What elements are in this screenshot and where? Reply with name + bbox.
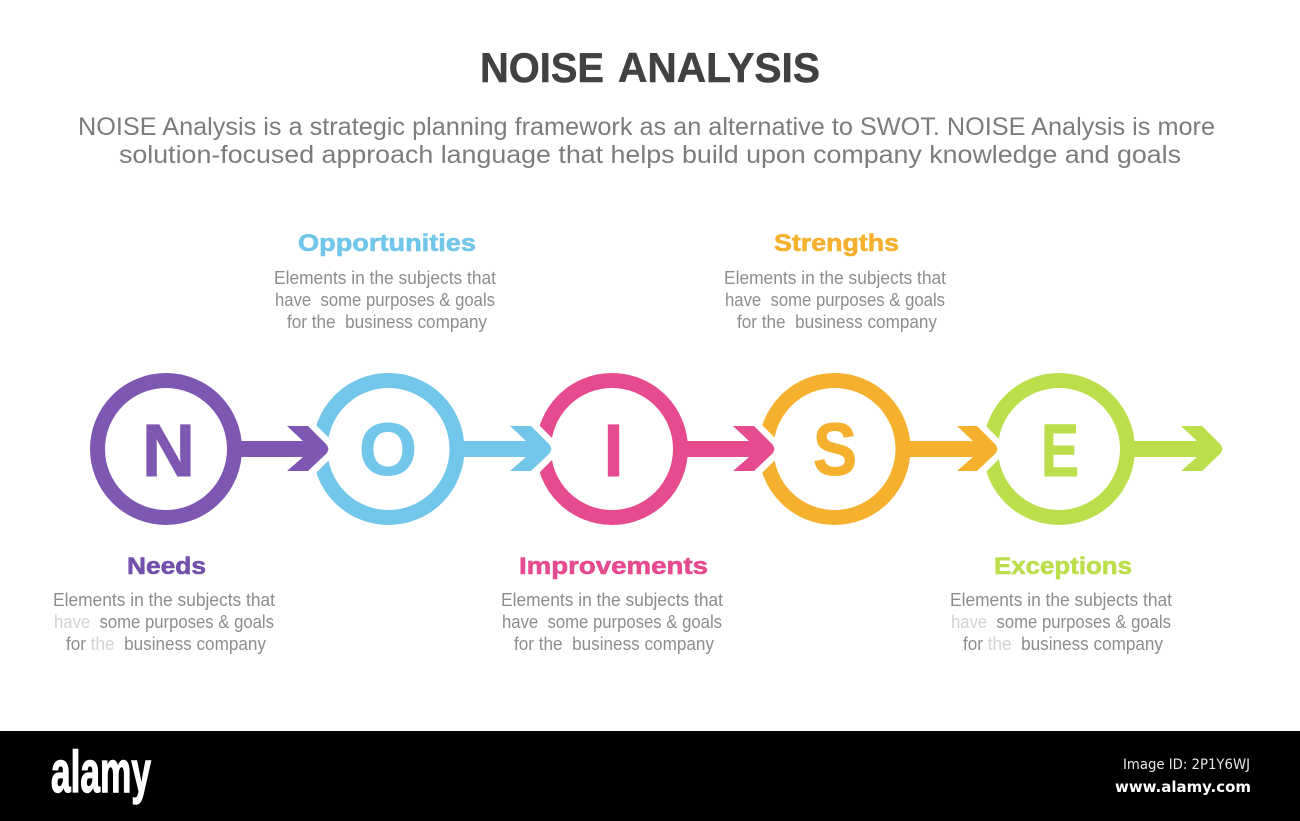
- step O: circle and letter: [320, 380, 457, 518]
- subtitle: NOISE Analysis is a strategic planning framework as an alternative to SWOT. NOISE Analysis is more: [78, 113, 1215, 141]
- text block: Needs: Elements in the subjects that: [53, 590, 275, 610]
- step E: circle and letter: E: [1041, 409, 1079, 492]
- arrow: N to O: [240, 409, 340, 489]
- text block: Needs: [53, 553, 275, 654]
- text block: Opportunities: Opportunities: [298, 230, 476, 257]
- title: ANALYSIS: [618, 44, 820, 91]
- text block: Exceptions: [950, 553, 1172, 654]
- text block: Strengths: have some purposes & goals: [725, 290, 945, 310]
- step I: circle and letter: I: [604, 409, 624, 492]
- subtitle: solution-focused approach language that helps build upon company knowledge and goals: [119, 141, 1181, 169]
- text block: Opportunities: have some purposes & goals: [275, 290, 495, 310]
- website: www.alamy.com: [1115, 778, 1251, 796]
- step O: circle and letter: O: [359, 408, 417, 491]
- image id: Image ID: 2P1Y6WJ: [1123, 757, 1250, 773]
- step E: circle and letter: [990, 380, 1128, 518]
- step S: circle and letter: S: [813, 408, 857, 491]
- text block: Opportunities: for the business company: [287, 312, 487, 332]
- title: NOISE: [480, 44, 604, 91]
- text block: Improvements: [501, 553, 723, 654]
- text block: Improvements: Elements in the subjects that: [501, 590, 723, 610]
- text block: Strengths: Strengths: [774, 230, 899, 257]
- text block: Strengths: for the business company: [737, 312, 937, 332]
- logo: alamy: alamy: [51, 740, 151, 805]
- text block: Exceptions: Elements in the subjects that: [950, 590, 1172, 610]
- step S: circle and letter: [766, 380, 903, 518]
- text block: Improvements: have some purposes & goals: [502, 612, 722, 632]
- text block: Needs: for the business company: [66, 634, 266, 654]
- text block: Needs: have some purposes & goals: [54, 612, 274, 632]
- text block: Exceptions: Exceptions: [994, 553, 1132, 580]
- text block: Improvements: for the business company: [514, 634, 714, 654]
- footer band: [0, 731, 1300, 821]
- text block: Exceptions: have some purposes & goals: [951, 612, 1171, 632]
- text block: Strengths: Elements in the subjects that: [724, 268, 946, 288]
- step N: circle and letter: [98, 380, 234, 518]
- arrow: S to E: [909, 409, 1009, 489]
- arrow: E outgoing: [1133, 426, 1222, 471]
- text block: Improvements: Improvements: [519, 553, 708, 580]
- text block: Opportunities: [274, 230, 496, 332]
- text block: Strengths: [724, 230, 946, 332]
- text block: Opportunities: Elements in the subjects that: [274, 268, 496, 288]
- step I: circle and letter: [544, 380, 680, 518]
- arrow: I to S: [686, 409, 786, 489]
- text block: Needs: Needs: [127, 553, 206, 580]
- text block: Exceptions: for the business company: [963, 634, 1163, 654]
- title: [480, 44, 820, 91]
- step N: circle and letter: N: [142, 409, 195, 492]
- arrow: O to I: [463, 409, 563, 489]
- subtitle: [78, 113, 1215, 169]
